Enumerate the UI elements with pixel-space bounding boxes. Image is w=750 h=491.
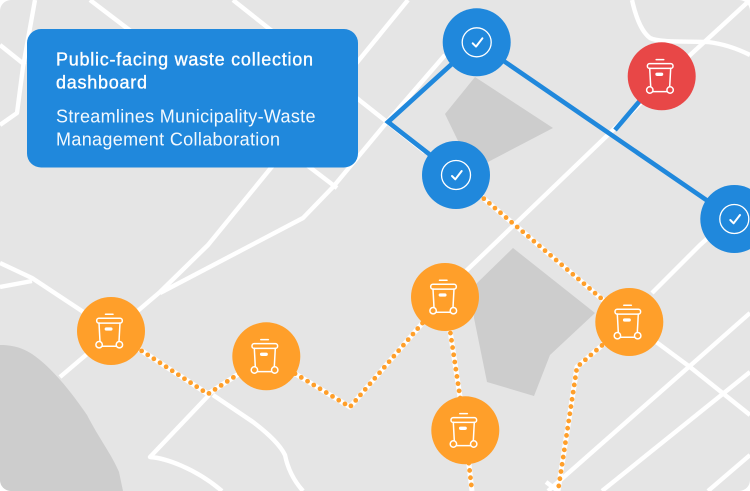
- marker: overflowing bin: [628, 42, 696, 110]
- marker: pending bin 3: [411, 263, 479, 331]
- marker: pending bin 5: [595, 288, 663, 356]
- marker: collected 1: [443, 8, 511, 76]
- collected route: solid blue lines: [384, 60, 708, 202]
- marker: pending bin 4: [431, 396, 499, 464]
- marker: collected 3: [700, 185, 750, 253]
- grey land parcels: [0, 77, 595, 491]
- marker: pending bin 2: [232, 322, 300, 390]
- callout description: Streamlines Municipality-Waste: [56, 106, 316, 126]
- callout heading: dashboard: [56, 72, 147, 92]
- pending route: dotted orange lines: [138, 195, 605, 491]
- marker: collected 2: [422, 141, 490, 209]
- callout heading: Public-facing waste collection: [56, 50, 313, 70]
- callout panel: [27, 29, 358, 168]
- callout description: Management Collaboration: [56, 130, 280, 150]
- marker: pending bin 1: [77, 297, 145, 365]
